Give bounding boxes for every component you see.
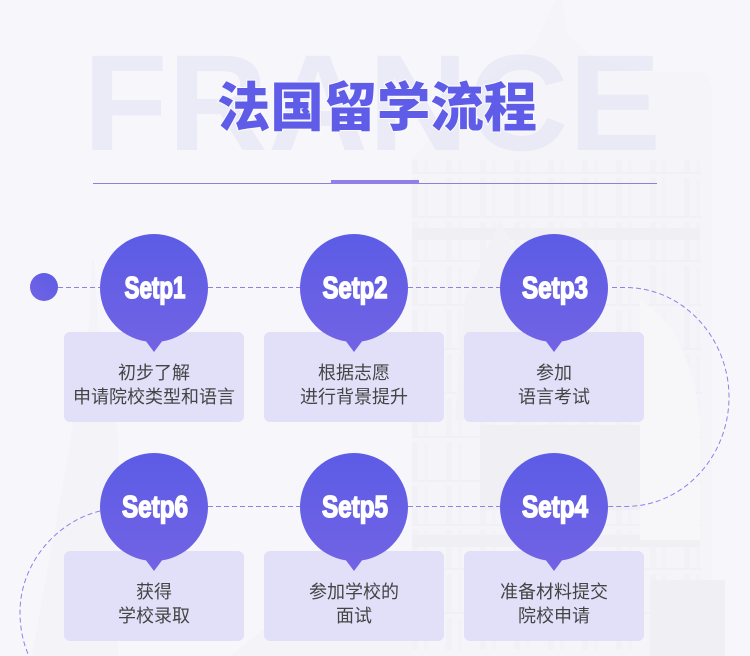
label: Setp5: [322, 489, 388, 524]
card: [464, 551, 644, 641]
label: Setp4: [522, 489, 589, 524]
title: 法国留学流程: [217, 79, 537, 138]
label: Setp2: [322, 270, 388, 305]
step 2: 进行背景提升: [300, 387, 408, 407]
step 1: 申请院校类型和语言: [73, 387, 235, 407]
bubble: [500, 234, 608, 352]
bubble: [300, 234, 408, 352]
description: 参加学校的: [309, 582, 399, 602]
step 6: 学校录取: [118, 606, 190, 626]
start dot: [30, 273, 58, 301]
card: [264, 332, 444, 422]
step 6: [64, 453, 244, 641]
step 5: [264, 453, 444, 641]
step 4: 院校申请: [518, 606, 590, 626]
dashed connector path: [20, 288, 729, 656]
step 3: 语言考试: [518, 387, 590, 407]
bubble: [300, 453, 408, 571]
label: Setp3: [522, 270, 588, 305]
step 4: [464, 453, 644, 641]
description: 获得: [136, 582, 172, 602]
watermark: FRANCE: FRANCE: [83, 27, 661, 180]
card: [64, 551, 244, 641]
description: 参加: [536, 363, 572, 383]
bubble: [500, 453, 608, 571]
description: 根据志愿: [318, 363, 390, 383]
description: 初步了解: [118, 363, 190, 383]
label: Setp1: [124, 270, 186, 305]
step 5: 面试: [336, 606, 372, 626]
card: [64, 332, 244, 422]
step 3: [464, 234, 644, 422]
description: 准备材料提交: [500, 582, 608, 602]
step 2: [264, 234, 444, 422]
bubble: [100, 453, 208, 571]
bubble: [100, 234, 208, 352]
label: Setp6: [122, 489, 188, 524]
title divider: [93, 180, 657, 184]
card: [264, 551, 444, 641]
card: [464, 332, 644, 422]
step 1: [64, 234, 244, 422]
